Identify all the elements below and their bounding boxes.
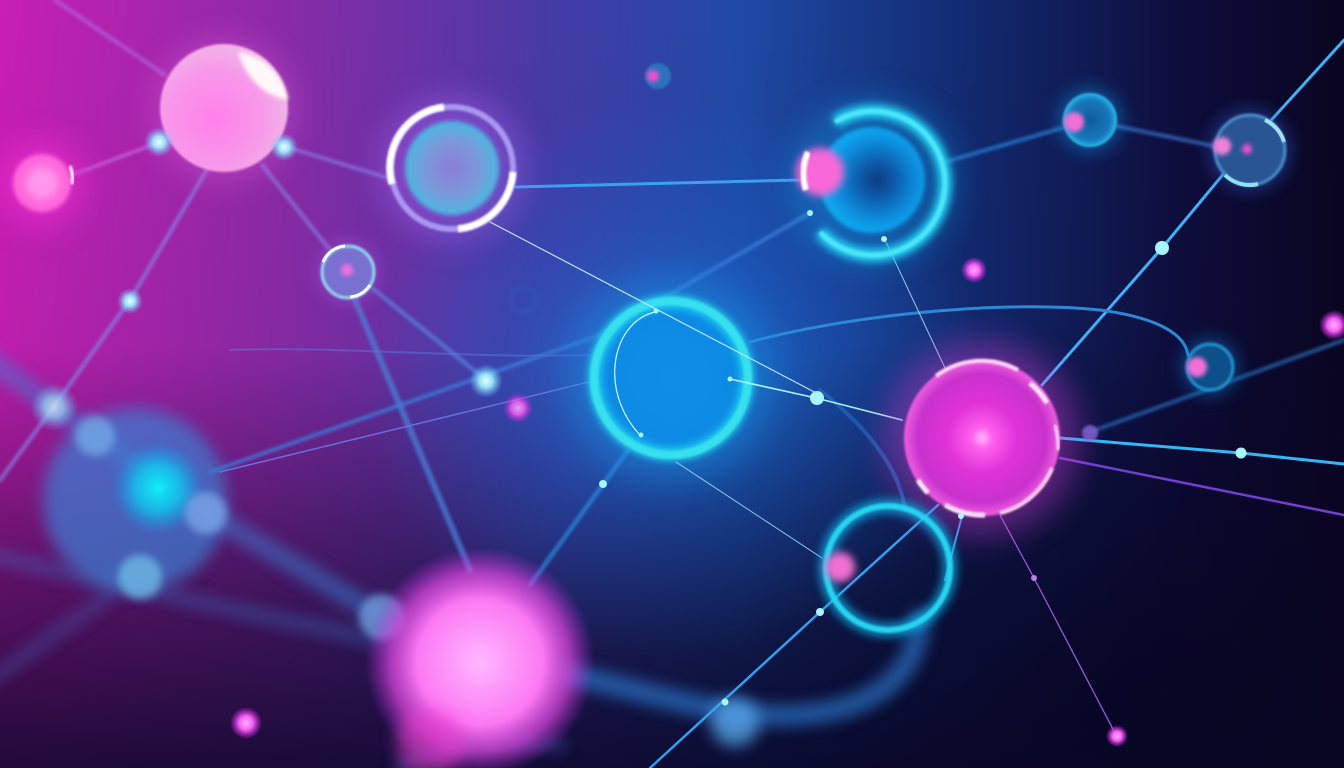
fine lines crossing the central ring — [490, 222, 902, 558]
node: central cyan ring — [566, 273, 776, 483]
soft network lines — [0, 0, 1344, 585]
node: right blue bubble — [1180, 337, 1240, 397]
small floating particles — [230, 63, 1344, 747]
node: right small bubble — [1056, 86, 1124, 154]
sharp connection lines — [220, 40, 1344, 768]
node: top-left pearl sphere — [152, 38, 296, 182]
node: grey ring top centre-left — [378, 94, 526, 242]
node: top cyan open ring — [788, 97, 958, 267]
small glowing dots on left lines — [30, 127, 503, 431]
node: small bubble left — [315, 239, 381, 305]
node: blurred blue-cyan cluster — [43, 408, 405, 640]
node: lower cyan ring — [825, 506, 950, 630]
node: left magenta sphere — [0, 139, 86, 227]
blurred background connections — [0, 360, 920, 768]
node: far right bubble — [1208, 108, 1292, 192]
node: large magenta ring sphere — [884, 340, 1080, 536]
node: large blurred pink glow — [365, 547, 759, 768]
small line junction dots — [599, 210, 1246, 706]
